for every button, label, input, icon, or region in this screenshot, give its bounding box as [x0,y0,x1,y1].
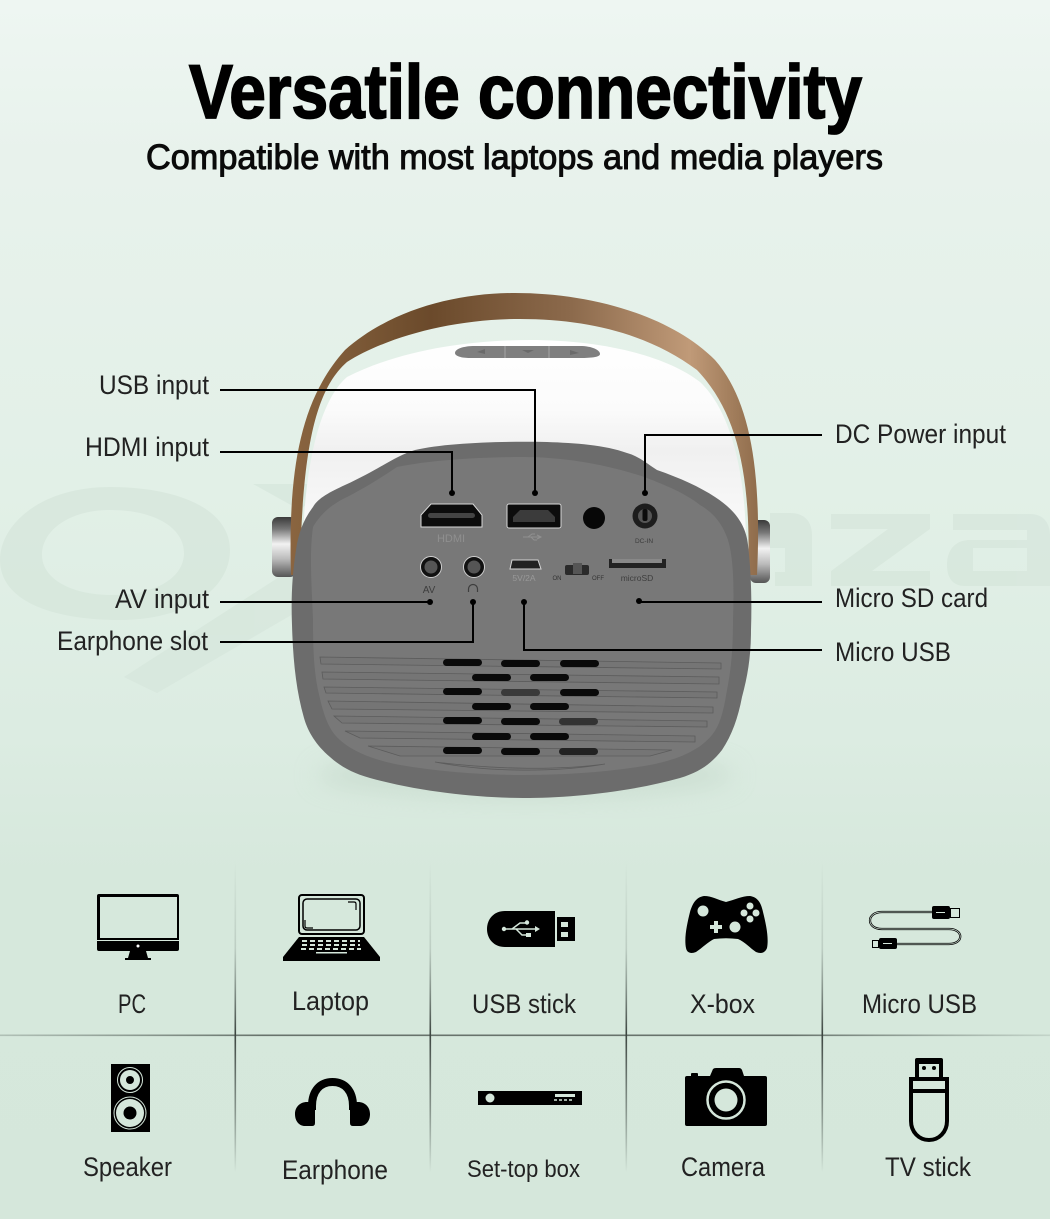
icon: earphone [295,1082,370,1126]
carry handle [291,293,758,575]
callout: Micro USB: Micro USB [835,637,951,667]
projector illustration [272,293,770,799]
micro USB port [510,560,541,583]
round hole [583,507,605,529]
label: Camera: Camera [681,1152,766,1182]
USB port [507,504,561,540]
label: Laptop: Laptop [292,986,369,1016]
callout: Micro SD card [636,583,988,613]
callout: Micro USB [521,599,951,667]
callout: AV input: AV input [115,584,209,614]
callout: Micro SD card: Micro SD card [835,583,988,613]
label: Speaker: Speaker [83,1152,172,1182]
subtitle: Compatible with most laptops and media players [146,138,883,177]
watermark: brand logo [0,484,1050,693]
DC port: DC-IN [635,538,653,545]
icon: TV stick [910,1058,948,1140]
callout: DC Power input: DC Power input [835,419,1006,449]
callout: HDMI input [85,432,455,496]
grey rear panel [292,442,751,798]
speaker slots [443,659,599,755]
icon: USB stick [487,911,575,947]
label: USB stick: USB stick [472,989,576,1019]
label: Micro USB: Micro USB [862,989,977,1019]
power switch [552,563,604,582]
power switch: ON [552,576,562,582]
side knob left [272,517,296,577]
DC port [632,504,658,545]
power switch: OFF [592,576,604,582]
label: Earphone: Earphone [282,1155,388,1185]
side knob right [750,520,770,583]
icon: laptop [283,895,380,961]
callout: DC Power input [642,419,1006,496]
callout: Earphone slot: Earphone slot [57,626,208,656]
callout: AV input [115,584,433,614]
micro SD slot [609,559,666,583]
label: TV stick: TV stick [885,1152,971,1182]
HDMI port [421,504,482,545]
icon: USB cable [870,906,960,949]
micro USB port: 5V/2A [512,573,536,583]
label: PC: PC [118,989,146,1019]
callout: USB input [99,370,538,496]
label: X-box: X-box [690,989,755,1019]
floor shadow [315,751,735,799]
control buttons [455,346,600,358]
speaker grille [320,657,721,770]
label: Set-top box: Set-top box [467,1156,580,1183]
HDMI port: HDMI [437,533,465,545]
earphone jack [464,556,484,592]
AV jack: AV [423,585,436,596]
micro SD slot: microSD [621,573,653,583]
title: Versatile connectivity [189,50,862,135]
callout: HDMI input: HDMI input [85,432,209,462]
callout: USB input: USB input [99,370,209,400]
icon: camera [685,1068,767,1126]
inner panel [311,457,733,775]
white body [303,340,746,540]
AV jack [420,556,442,596]
icon: PC monitor [97,894,179,960]
icon: game controller [685,896,768,953]
icon: speaker [111,1064,150,1132]
icon: set-top box [478,1091,582,1105]
callout: Earphone slot [57,599,476,656]
